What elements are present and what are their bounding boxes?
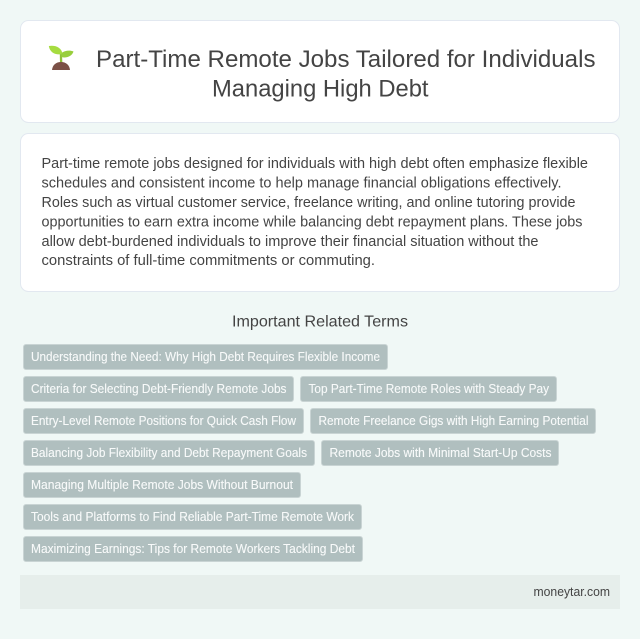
tag: maximizing earnings — [24, 536, 362, 562]
footer bar — [20, 575, 620, 609]
text block: description: allow debt-burdened individuals to improve their financial situation without the — [42, 234, 538, 250]
tag: criteria: Criteria for Selecting Debt-Friendly Remote Jobs — [31, 381, 286, 396]
tag: minimal start-up costs — [322, 440, 558, 466]
text block: description: schedules and consistent income to help manage financial obligations effectively. — [42, 176, 562, 192]
tag: maximizing earnings: Maximizing Earnings: Tips for Remote Workers Tackling Debt — [31, 541, 355, 556]
footer source text: moneytar.com — [534, 584, 610, 599]
tag: freelance gigs: Remote Freelance Gigs with High Earning Potential — [318, 413, 588, 428]
tag: freelance gigs — [310, 408, 596, 434]
tag: tools and platforms — [24, 504, 362, 530]
tag: criteria — [24, 376, 294, 402]
title: Managing High Debt — [212, 76, 429, 102]
tag: minimal start-up costs: Remote Jobs with Minimal Start-Up Costs — [330, 445, 552, 460]
text block: description: Part-time remote jobs designed for individuals with high debt often emphasize flexible — [42, 156, 588, 172]
tag: top roles — [300, 376, 556, 402]
tag: entry-level — [24, 408, 304, 434]
title: Part-Time Remote Jobs Tailored for Individuals — [96, 46, 596, 73]
tag: entry-level: Entry-Level Remote Positions for Quick Cash Flow — [31, 413, 297, 428]
tag: top roles: Top Part-Time Remote Roles with Steady Pay — [308, 381, 550, 396]
tag: balancing flexibility: Balancing Job Flexibility and Debt Repayment Goals — [31, 445, 307, 460]
tag: tools and platforms: Tools and Platforms to Find Reliable Part-Time Remote Work — [31, 509, 355, 524]
icon: sprout — [49, 46, 74, 70]
tag: understanding the need — [24, 344, 388, 370]
text block: description — [42, 156, 588, 269]
tag: managing multiple jobs: Managing Multiple Remote Jobs Without Burnout — [31, 477, 293, 492]
title — [96, 46, 596, 102]
text block: description: Roles such as virtual customer service, freelance writing, and online tutoring provide — [42, 195, 576, 211]
tag: managing multiple jobs — [24, 472, 300, 498]
text block: description: constraints of full-time commitments or commuting. — [42, 253, 375, 269]
panel: title card — [20, 20, 620, 122]
tag: balancing flexibility — [24, 440, 314, 466]
tag: understanding the need: Understanding the Need: Why High Debt Requires Flexible Income — [31, 349, 380, 364]
panel: description card — [20, 134, 620, 292]
heading: important related terms: Important Related Terms — [232, 314, 408, 330]
panel: related term tags — [24, 344, 596, 562]
text block: description: opportunities to earn extra income while balancing debt repayment plans. These jobs — [42, 214, 582, 230]
